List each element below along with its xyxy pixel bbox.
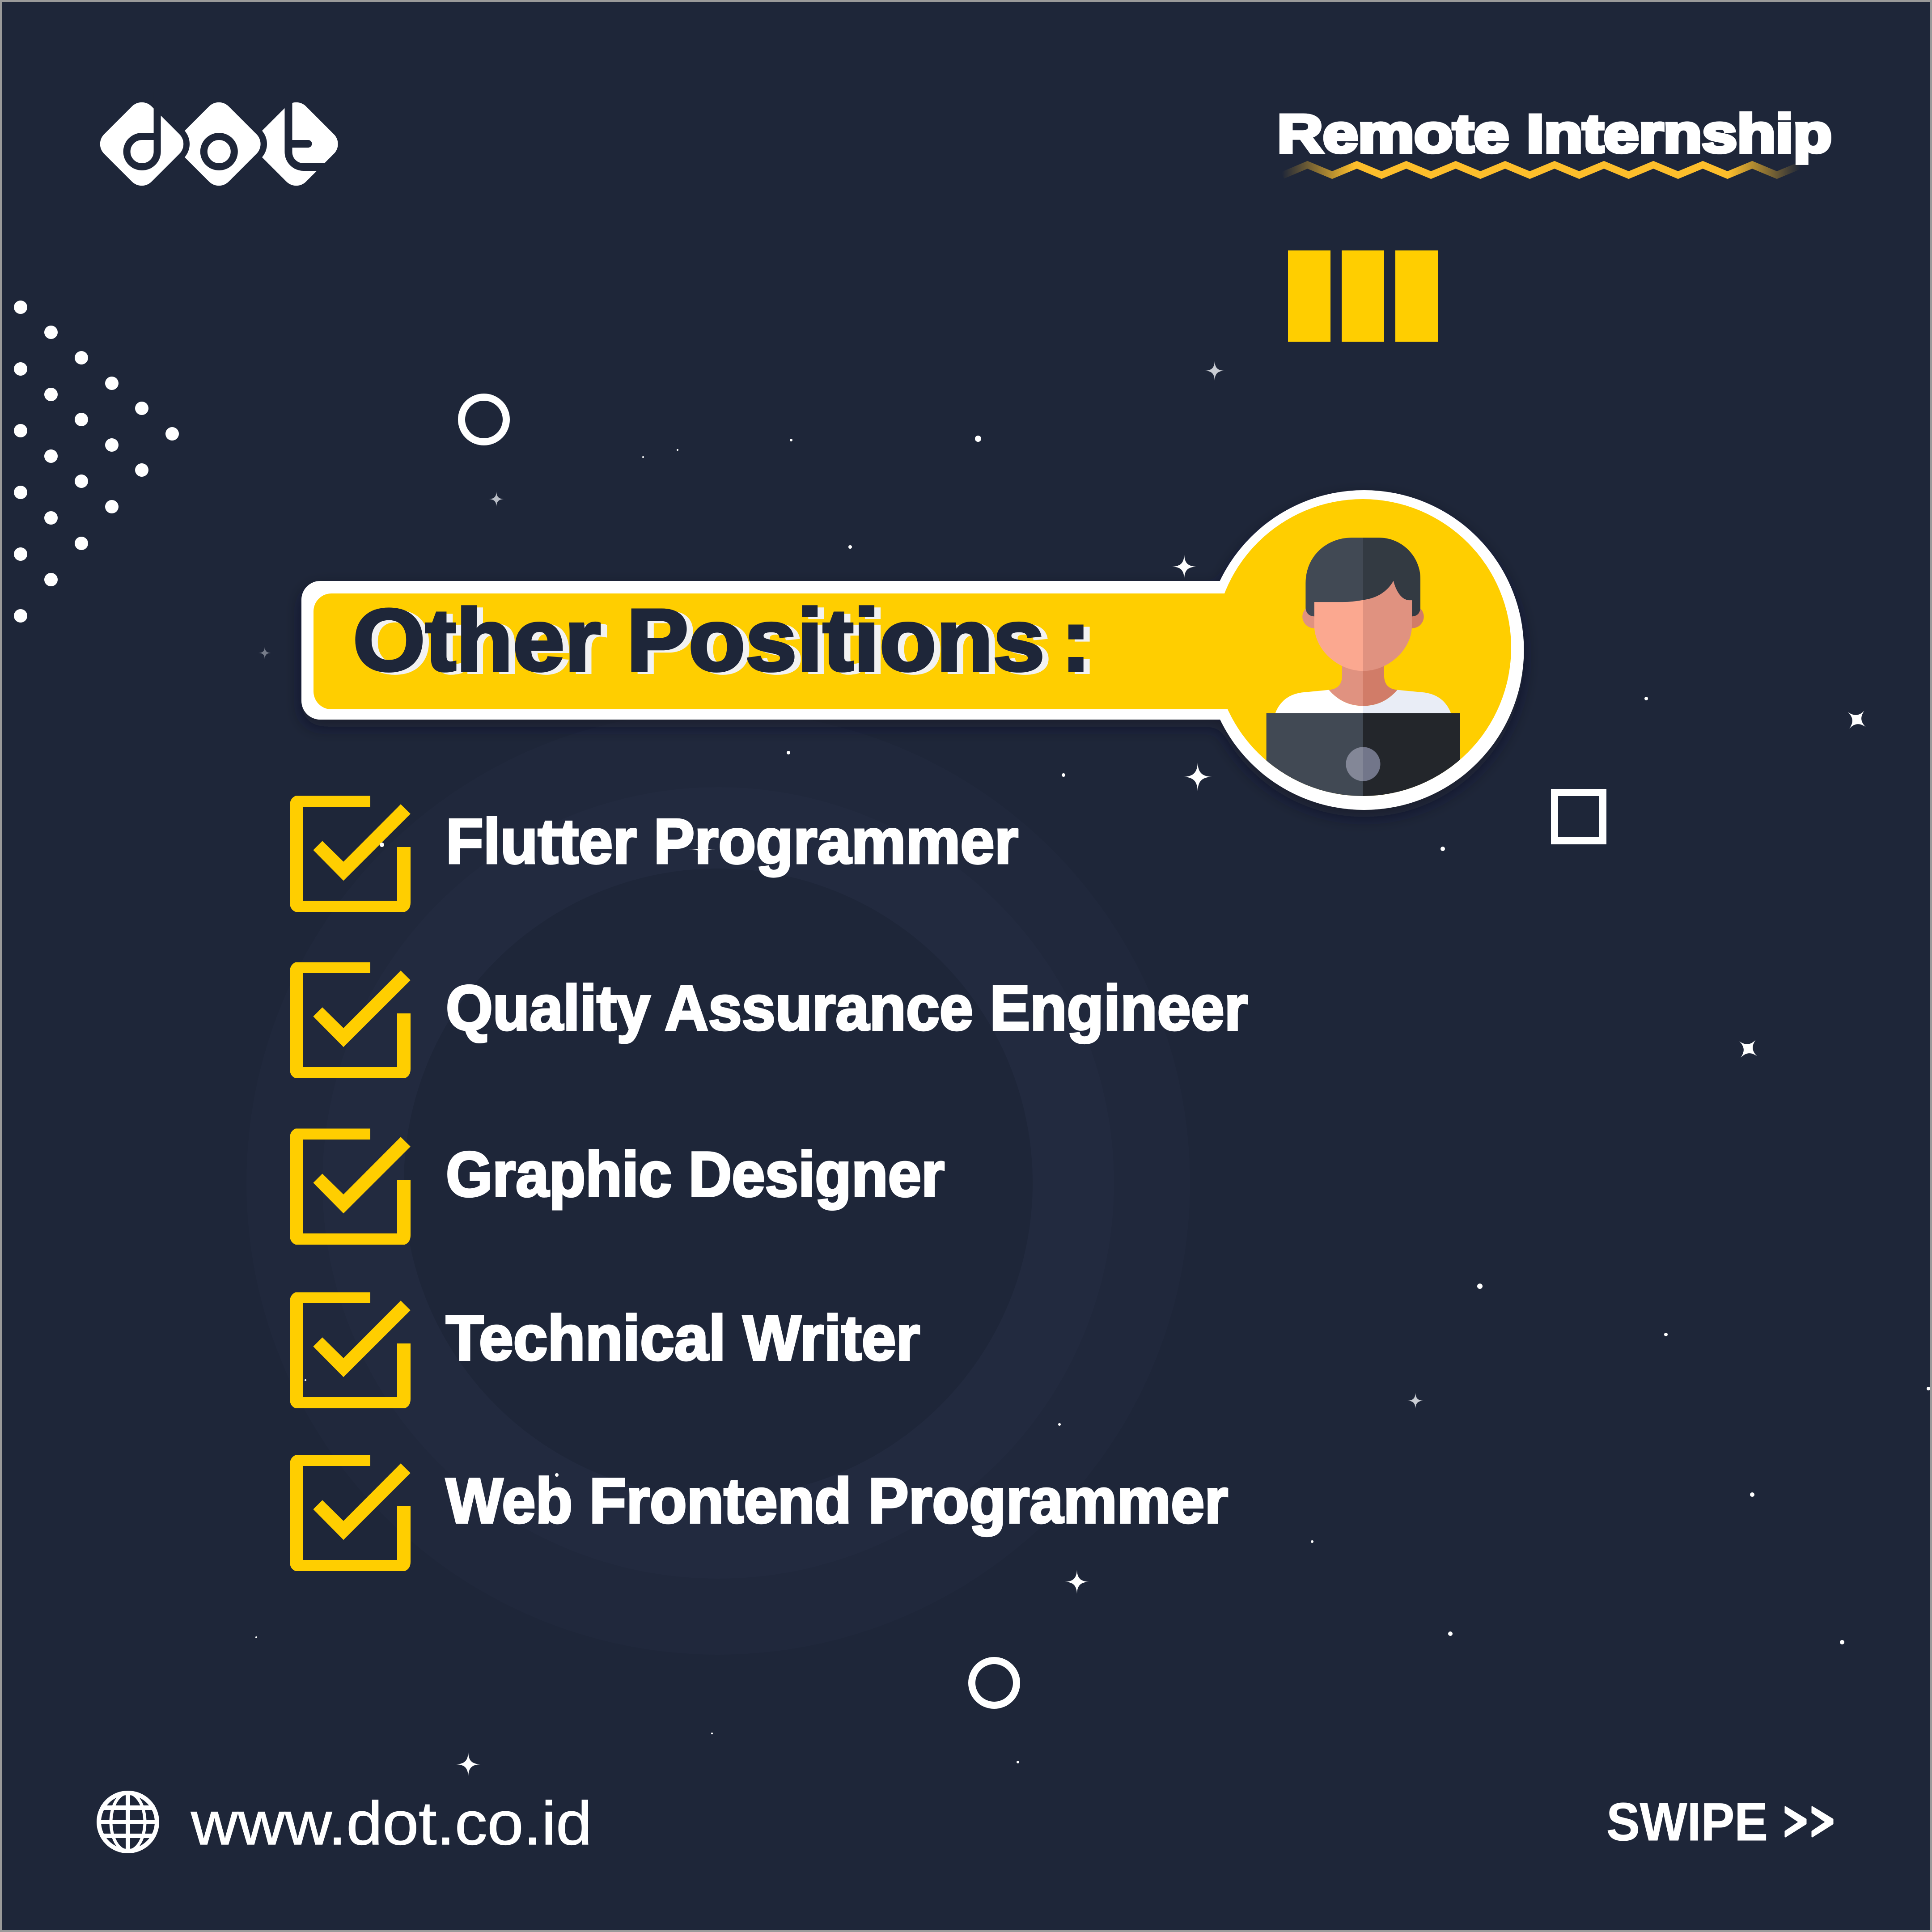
- checkbox: [290, 1292, 411, 1408]
- header: zigzag underline: [1283, 165, 1800, 175]
- stars over list text: [380, 843, 716, 1477]
- banner title: :: [1061, 591, 1091, 689]
- icon: swipe arrows: [1785, 1807, 1833, 1837]
- shirt: [1275, 690, 1451, 713]
- sparkle stars: [258, 361, 1873, 1776]
- background concentric rings: [246, 711, 1190, 1655]
- banner white outline: [301, 490, 1524, 810]
- list item 4: [290, 1292, 920, 1408]
- list item 3: [290, 1129, 945, 1245]
- label: Quality Assurance Engineer: [446, 972, 1248, 1044]
- label: Flutter Programmer: [446, 806, 1018, 877]
- label: Technical Writer: [446, 1302, 920, 1374]
- square decoration: [1555, 792, 1603, 841]
- logo: dot: [94, 92, 349, 191]
- slide number bars: [1288, 250, 1438, 342]
- ears: [1302, 605, 1424, 628]
- list item 5: [290, 1455, 1228, 1571]
- dot triangle pattern: [14, 301, 179, 623]
- hair: [1305, 538, 1420, 616]
- face: [1314, 572, 1412, 671]
- swipe label: SWIPE: [1606, 1792, 1768, 1852]
- checkbox: [290, 1129, 411, 1245]
- banner with avatar: [301, 490, 1524, 810]
- checkbox: [290, 962, 411, 1078]
- laptop: [1267, 713, 1460, 796]
- list item 2: [290, 962, 1248, 1078]
- ring decoration top: [462, 397, 506, 442]
- neck: [1329, 663, 1397, 706]
- list item 1: [290, 796, 1018, 912]
- banner title: Other Positions: [353, 591, 1045, 689]
- checkbox: [290, 1455, 411, 1571]
- ring decoration bottom: [972, 1661, 1017, 1705]
- banner yellow fill: [314, 499, 1511, 796]
- header: Remote Internship: Remote Internship: [1277, 104, 1832, 164]
- checkbox: [290, 796, 411, 912]
- scattered star dots: [255, 436, 1930, 1763]
- label: Graphic Designer: [446, 1139, 945, 1210]
- icon: globe: [97, 1793, 158, 1851]
- label: Web Frontend Programmer: [446, 1465, 1228, 1537]
- website url: www.dot.co.id: [191, 1789, 592, 1858]
- avatar person: [1267, 538, 1460, 806]
